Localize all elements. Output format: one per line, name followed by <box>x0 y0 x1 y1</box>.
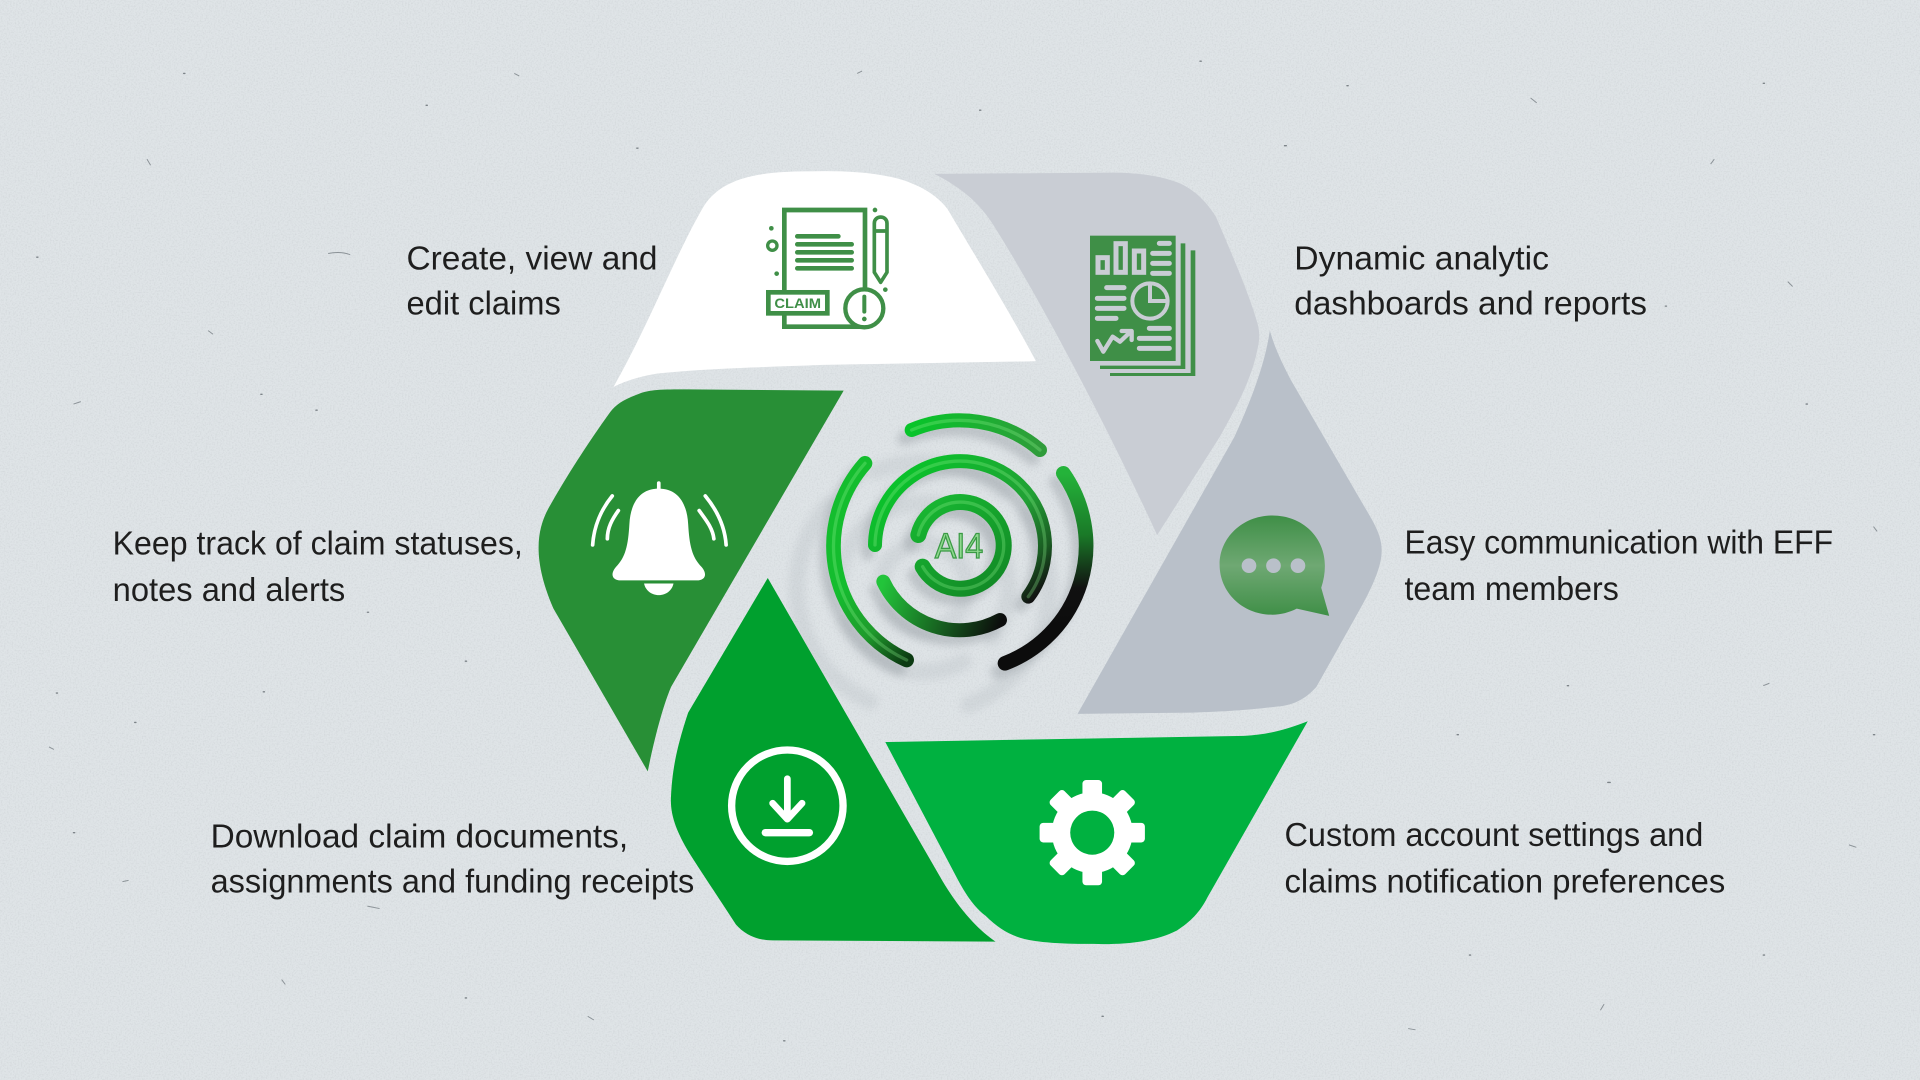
segment: dark green alerts <box>539 389 844 771</box>
icon: bell <box>593 483 726 595</box>
icon: claim document: CLAIM <box>774 295 821 311</box>
segment: green download <box>671 578 996 942</box>
center logo: AI4 <box>935 527 983 566</box>
icon: claim document <box>768 208 888 327</box>
text: settings: claims notification preferences <box>1284 864 1725 901</box>
icon: report dashboard <box>1090 236 1195 376</box>
text: create claims <box>407 240 658 323</box>
text: downloads <box>211 818 694 901</box>
text: create claims: edit claims <box>407 286 561 323</box>
text: communication <box>1404 524 1833 608</box>
text: dashboards: Dynamic analytic <box>1294 240 1549 277</box>
icon: download <box>732 750 843 861</box>
text: alerts: Keep track of claim statuses, <box>113 526 523 563</box>
text: communication: Easy communication with EFF <box>1404 524 1833 561</box>
icon: chat bubble <box>1220 516 1329 616</box>
text: create claims: Create, view and <box>407 240 658 277</box>
logo shadow <box>797 429 1079 705</box>
icon: gear <box>1040 780 1145 885</box>
segment: grey communication <box>1078 331 1382 714</box>
text: downloads: assignments and funding receipts <box>211 864 694 901</box>
center logo <box>834 420 1086 663</box>
segment: white claims <box>613 171 1036 387</box>
segment: grey dashboards <box>934 173 1259 535</box>
text: settings <box>1284 817 1725 901</box>
text: dashboards <box>1294 240 1647 323</box>
text: communication: team members <box>1404 571 1619 608</box>
segment: green settings <box>885 721 1308 944</box>
text: dashboards: dashboards and reports <box>1294 286 1647 323</box>
text: settings: Custom account settings and <box>1284 817 1703 854</box>
text: downloads: Download claim documents, <box>211 818 628 855</box>
text: alerts: notes and alerts <box>113 572 345 609</box>
text: alerts <box>113 526 523 609</box>
